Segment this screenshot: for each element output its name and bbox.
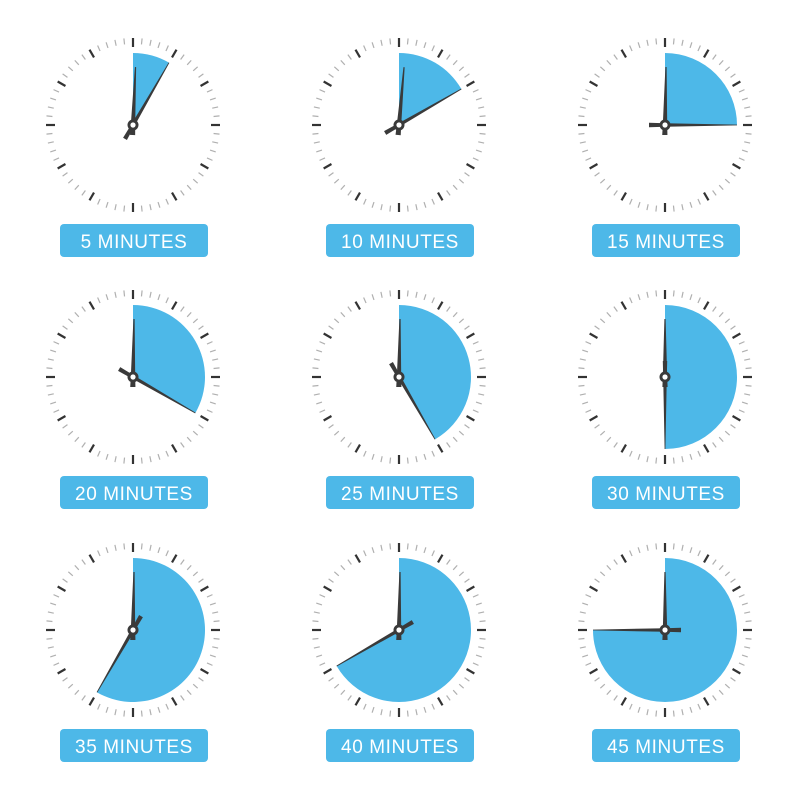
label: 15 minutes: 15 MINUTES	[607, 232, 725, 253]
label: 5 minutes: 5 MINUTES	[81, 232, 187, 253]
clock: 45 minutes	[578, 543, 752, 717]
label: 45 minutes	[592, 729, 740, 762]
label: 40 minutes: 40 MINUTES	[341, 737, 459, 758]
clock: 5 minutes	[46, 38, 220, 212]
label: 15 minutes	[592, 224, 740, 257]
label: 30 minutes	[592, 476, 740, 509]
clock: 40 minutes	[312, 543, 486, 717]
label: 10 minutes	[326, 224, 474, 257]
label: 10 minutes: 10 MINUTES	[341, 232, 459, 253]
label: 35 minutes: 35 MINUTES	[75, 737, 193, 758]
clock: 15 minutes	[578, 38, 752, 212]
clock: 30 minutes	[578, 290, 752, 464]
label: 45 minutes: 45 MINUTES	[607, 737, 725, 758]
label: 5 minutes	[60, 224, 208, 257]
clock: 10 minutes	[312, 38, 486, 212]
label: 20 minutes: 20 MINUTES	[75, 484, 193, 505]
label: 35 minutes	[60, 729, 208, 762]
label: 25 minutes	[326, 476, 474, 509]
label: 20 minutes	[60, 476, 208, 509]
label: 30 minutes: 30 MINUTES	[607, 484, 725, 505]
label: 25 minutes: 25 MINUTES	[341, 484, 459, 505]
clock: 20 minutes	[46, 290, 220, 464]
clock: 35 minutes	[46, 543, 220, 717]
label: 40 minutes	[326, 729, 474, 762]
clock: 25 minutes	[312, 290, 486, 464]
